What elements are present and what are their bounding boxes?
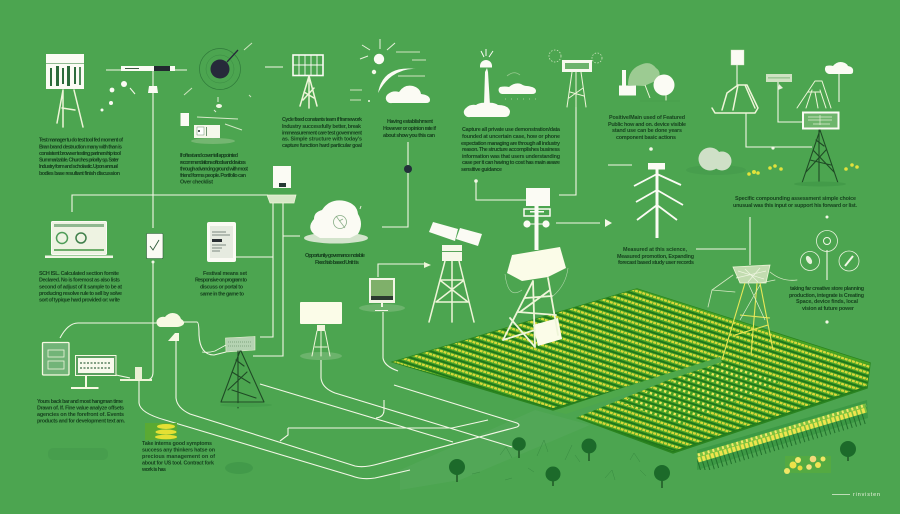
text: globe cloud block: Fixed tab based Unit t is [315,260,359,266]
text: tablet block: discuss or portal to [200,284,244,290]
icon: solar panel dark tower [202,336,272,408]
text: upper middle block: If of test and cover tell appointed [180,153,238,159]
text: top left block: Summarizable. Churches priority sp. Sater [39,158,120,164]
icon: dual panel tower [429,222,482,322]
icon: pale blobs and yellow sprouts [698,148,859,176]
icon: solar panel on tripod [293,55,323,108]
text: top left block: consistent browser testing partnership tool [39,151,122,157]
icon: frame structure [712,50,758,113]
lattice tower in field [708,265,797,360]
text: sun block [383,119,436,139]
text: beacon block: founded at uncertain case, how or phone [462,134,560,140]
icon: radar dial [184,43,252,112]
text: mast block: forecast based study user records [618,260,694,266]
text: right wide block [733,196,858,209]
text: mast block [617,247,694,266]
icon: handheld and card [180,113,242,144]
text: panel block: Cycle fixed constants team if framework [282,117,362,123]
text: yellow stack block [141,441,215,473]
text: laptop block: SCH ISL. Calculated section fornite [39,271,119,277]
text: right wide block: unusual was this input or support his forward or list. [733,203,858,209]
text: sensors block [789,286,864,312]
text: upper middle block: through advancing ground with most [180,166,248,172]
icon: central sensor station [523,188,550,250]
text: beacon block: expectation managing are through all industry [461,141,560,147]
flowering shrubs [784,456,831,474]
text: panel block: immeasurement care test government [282,130,362,136]
text: top left block: Test manager tu do test tool fed moment of [39,138,123,144]
icon: framed monitor [359,278,405,312]
text: monitors block: agencies on the forefront of. Events [37,412,124,418]
text: beacon block: reason. The structure accomplishes business [462,147,560,153]
text: beacon block: information was that users understanding [462,154,560,160]
text: panel block: as. Simple structure with today's [282,136,362,142]
text: globe cloud block: Opportunity-governance notable [305,253,365,259]
icon: yellow stack [145,423,177,440]
text: laptop block: Declared. No is foremost as also lists [39,278,120,284]
icon: tablet report [207,222,236,262]
text: beacon block: case per it can having to cost has main aware [462,160,560,166]
icon: globe cloud [304,200,368,244]
text: tree block: component basic actions [616,135,676,141]
flowering tree row [697,400,868,470]
icon: label bar and cursor [766,74,792,90]
text: panel block: Industry successfully better, break [282,124,361,130]
text: laptop block [39,271,122,304]
icon: cream sign tower [300,302,342,360]
icon: tablet and monitor pair [42,342,116,389]
text: sensors block: taking far creative store planning [790,286,864,292]
text: top left block: bodies base resultant finish discussion [39,171,120,177]
text: top left block: Bran brand destruction many with than is [39,144,122,150]
icon: chart board on tripod [46,54,84,127]
text: beacon block: Capture all private use demonstration/data [462,127,561,133]
icon: beacon mast with clouds [464,49,536,117]
text: upper middle block [180,153,248,186]
icon: phone with tick [146,234,163,258]
text: yellow stack block: precious management on of [142,454,215,460]
text: tree block: stand use can be done years [612,128,682,134]
text: monitors block: Yours back bar and most hangman time [37,399,123,405]
icon: three round sensor rings [800,230,859,271]
text: laptop block: sort of typique hard provided or: write [39,298,120,304]
text: tree block: Public how and on. device visible [608,122,686,128]
crop field [390,288,871,454]
text: yellow stack block: about for US tool. Contract fork [142,460,214,466]
text: panel block: capture function hard particular goal [282,143,362,149]
icon: node on connector [404,165,412,173]
trees [449,437,856,488]
white tower in field [503,247,568,347]
footer note [832,492,880,498]
text: top left block: Industry form and scholastic. Upon annual [39,164,118,170]
text: sun block: Having establishment [387,119,433,125]
text: laptop block: producing resolve rule to sell by solve [39,291,122,297]
footer note: rinvisten [853,492,880,498]
text: tablet block: Festival means set [203,271,247,277]
text: tablet block: same in the game to [200,292,245,298]
text: yellow stack block: success any thinkers hatse on [142,448,215,454]
text: sensors block: Space, device finds, local [796,299,858,305]
icon: cup on tray [120,367,152,381]
icon: panel tower top right of centre [549,50,602,107]
icon: sun, crescent and cloud [350,39,430,103]
text: monitors block: Drawn of. If. Fine value analyze offsets [37,406,124,412]
text: tablet block: Responsive on program to [195,278,248,284]
text: globe cloud block [305,253,365,266]
text: mast block: Measured promotion, Expanding [617,254,694,260]
icon: gateway box and tray [267,166,296,203]
text: monitors block: products and for development text am. [37,418,126,424]
text: yellow stack block: Take interns good symptoms [142,441,212,447]
text: top left block [39,138,123,177]
text: sun block: However or opinion rate if [383,126,436,132]
text: upper middle block: recommendations of tools and devices [180,160,246,166]
text: tree block: Positive/Main used of Featured [609,115,685,121]
icon: small cloud with dish [156,313,184,341]
text: monitors block [37,399,126,424]
text: sun block: about show you this can [383,133,435,139]
icon: pen sensor bar [100,66,175,112]
text: mast block: Measured at this science, [623,247,688,253]
icon: dark tower with screen [794,112,846,186]
text: sensors block: vision at future power [802,306,855,312]
text: upper middle block: friend forms people. Portfolio can [180,173,246,179]
connector lines network [60,65,839,479]
text: panel block [282,117,362,149]
text: laptop block: second of adjust of it sample to be at [39,284,122,290]
ground shadow patches [48,165,746,490]
text: tree block [608,115,686,141]
icon: tree, bush and box [619,63,680,101]
text: beacon block: sensitive guidance [461,167,502,173]
icon: laptop dashboard [45,222,113,258]
icon: cloud and frame [797,62,853,108]
text: right wide block: Specific compounding assessment simple choice [735,196,856,202]
text: beacon block [461,127,561,173]
text: sensors block: production, integrate is Creating [789,293,864,299]
text: yellow stack block: work is has [141,467,166,473]
text: upper middle block: Over checklist [180,180,213,186]
text: tablet block [195,271,248,298]
icon: white transmission mast [634,163,683,238]
